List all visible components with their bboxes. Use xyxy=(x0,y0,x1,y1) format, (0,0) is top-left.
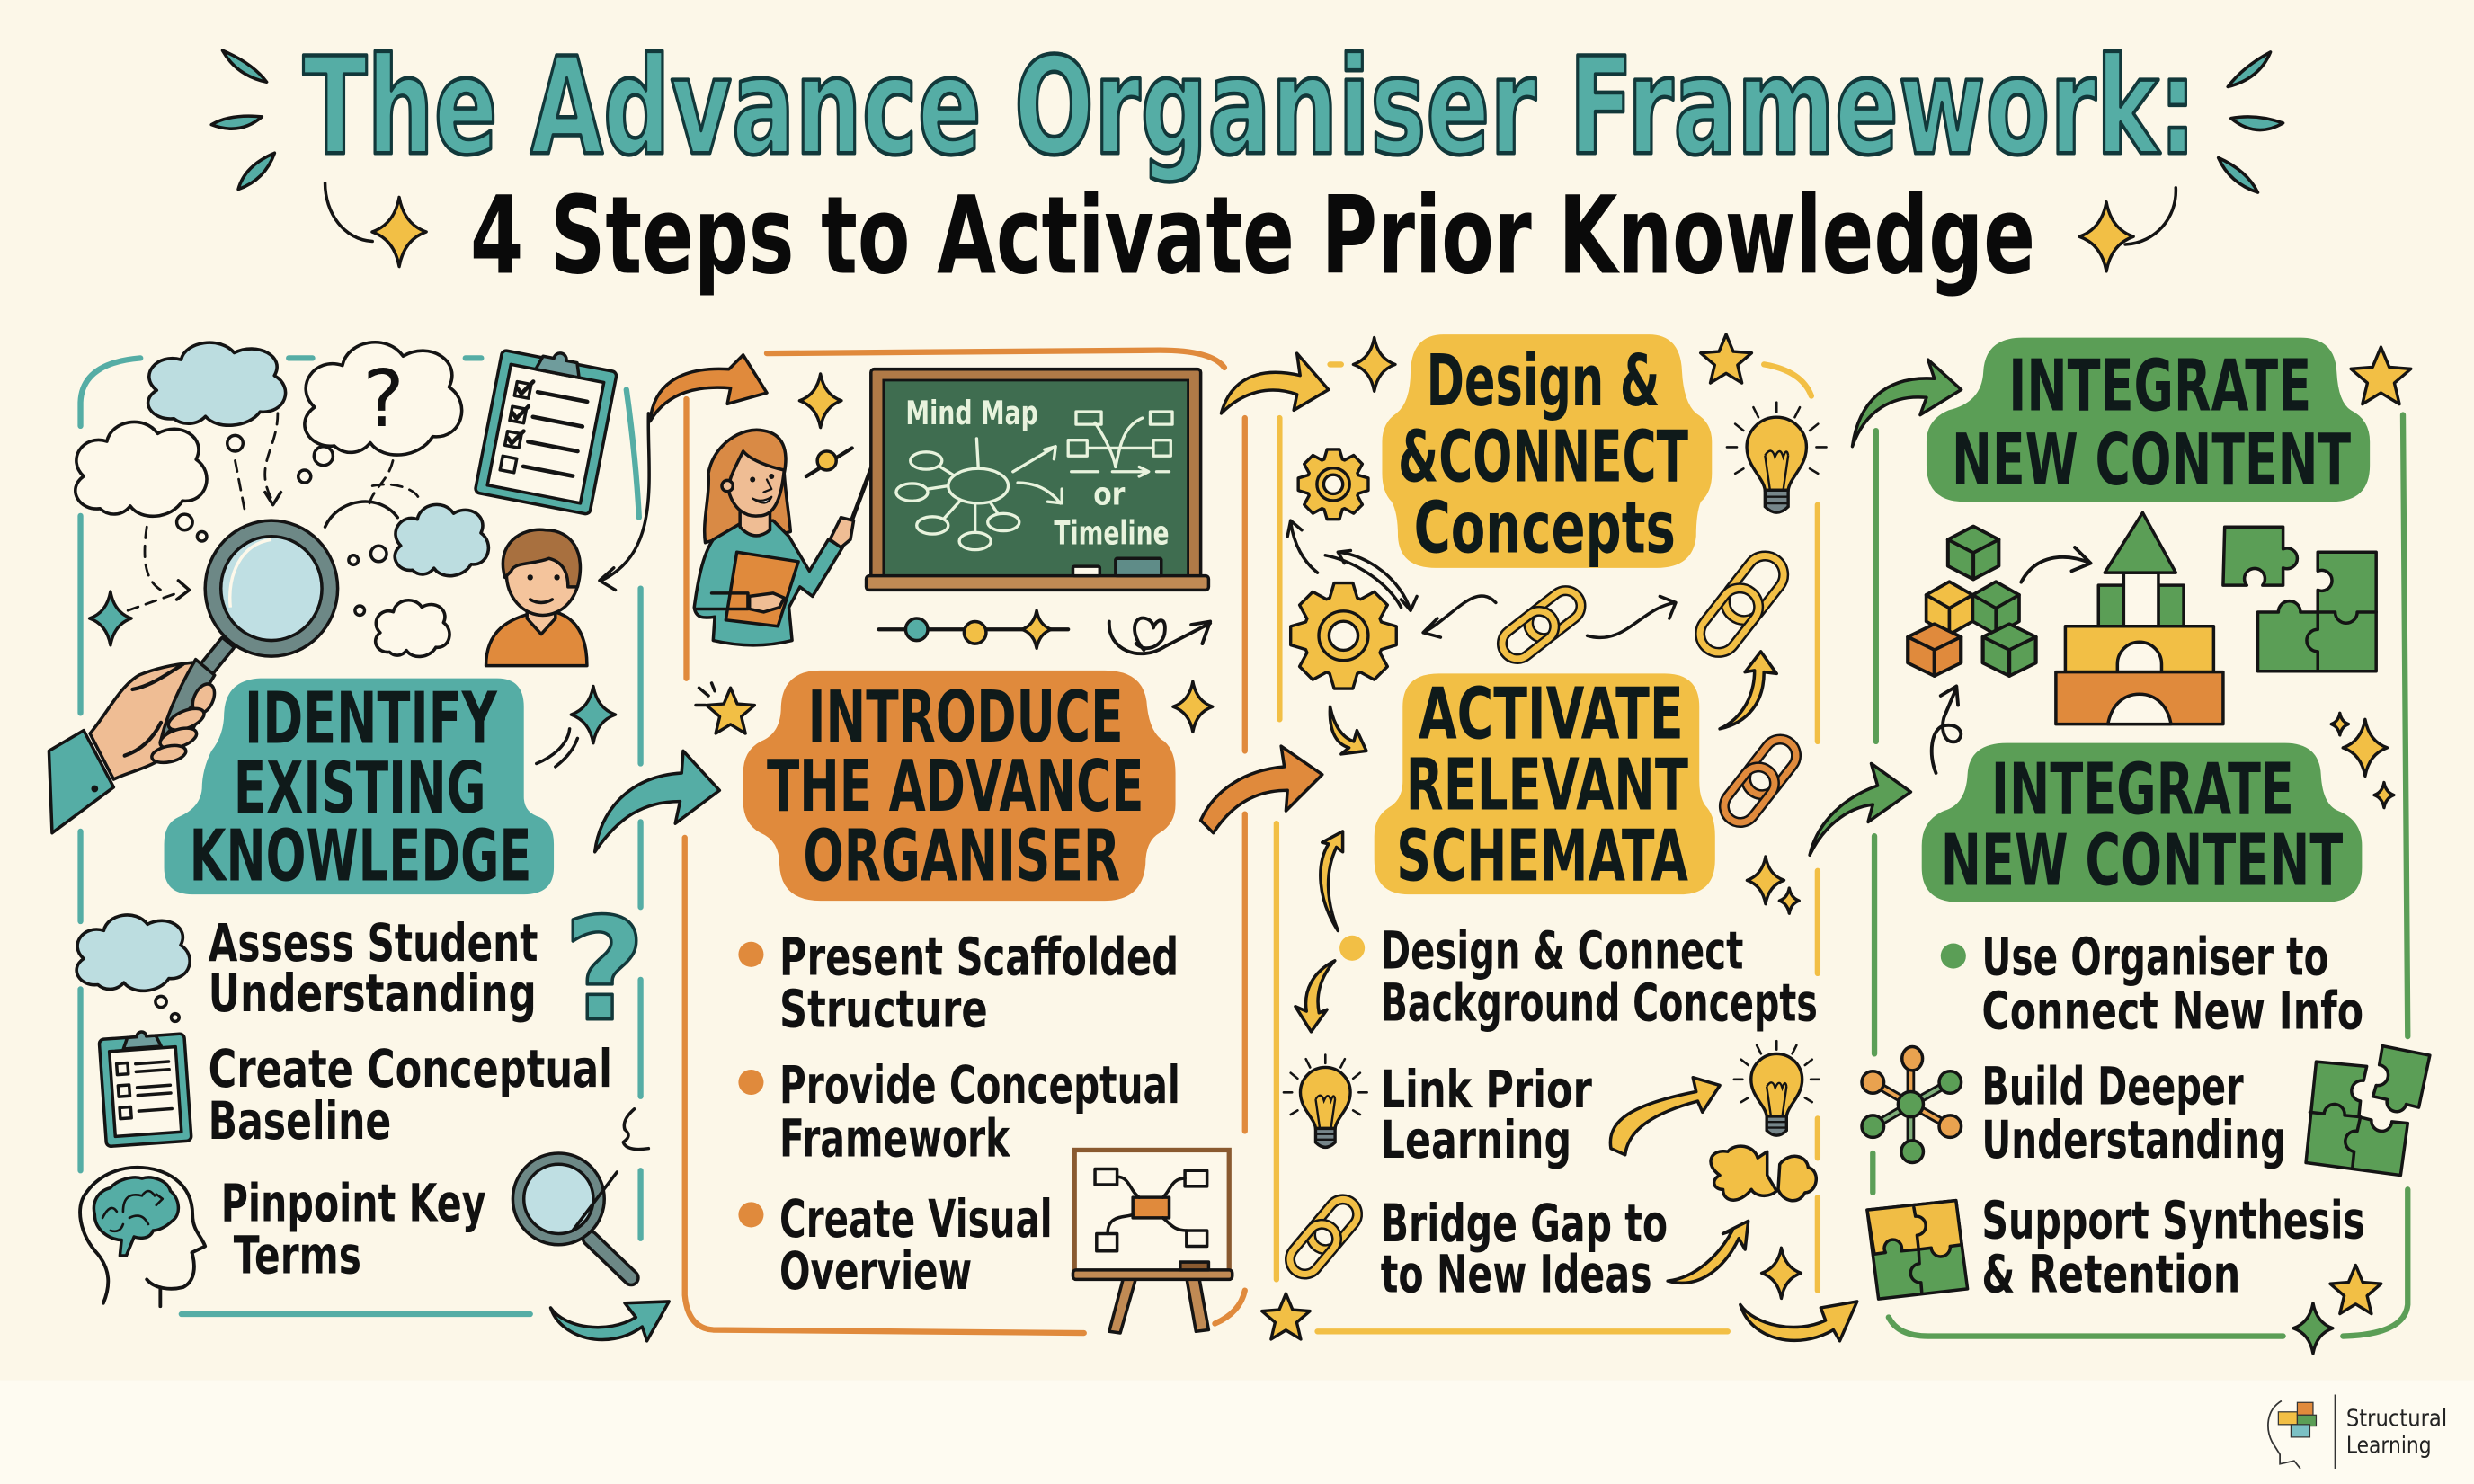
list: step 3 text: Bridge Gap to xyxy=(1381,1193,1668,1254)
icon: sparkle xyxy=(1762,1248,1801,1298)
icon: small gear xyxy=(1298,449,1368,520)
arrow: into step 4 xyxy=(1852,360,1962,447)
heading pill: introduce the advance organiser: ORGANISER xyxy=(803,814,1120,897)
thought dots and dashed links xyxy=(128,413,418,615)
heading pill: integrate new content xyxy=(1927,338,2370,502)
panel outline xyxy=(81,358,641,1314)
heading pill: integrate new content: INTEGRATE xyxy=(2008,344,2311,427)
arrow: into step 3 xyxy=(1221,353,1329,413)
icon: question thought cloud xyxy=(305,342,462,455)
heading pill: introduce the advance organiser: INTRODUCE xyxy=(808,676,1124,759)
icon: small blue cloud xyxy=(395,504,488,576)
icon: star xyxy=(2330,1266,2381,1314)
arrow: curved link to student xyxy=(600,413,649,590)
icon: teal sparkle xyxy=(90,591,131,645)
icon: sparkle xyxy=(799,374,841,428)
heading pill: identify existing knowledge: KNOWLEDGE xyxy=(190,814,531,897)
arrow: into step 2 xyxy=(650,355,767,422)
title accents xyxy=(211,50,2283,271)
heading pill: integrate new content second: INTEGRATE xyxy=(1991,749,2294,831)
list: step 3 text: Link Prior xyxy=(1381,1059,1592,1120)
text: pinpoint key terms xyxy=(221,1172,486,1285)
panel: step 4 integrate xyxy=(1810,338,2430,1354)
logo: structural learning xyxy=(2268,1394,2447,1469)
heading pill: introduce the advance organiser: THE ADVANCE xyxy=(767,745,1144,828)
icon: small clipboard xyxy=(99,1029,191,1147)
chalkboard: or xyxy=(1093,476,1126,513)
arrow: second green arrow xyxy=(1810,763,1910,855)
list: step 3 text: Design & Connect xyxy=(1381,920,1743,982)
text: create conceptual baseline: Baseline xyxy=(209,1090,391,1151)
logo: structural learning: Structural xyxy=(2346,1405,2447,1432)
icon: timeline doodle xyxy=(879,610,1068,648)
list: step 4 text xyxy=(1941,927,2365,1304)
icon: small cloud xyxy=(76,915,190,1021)
text: create conceptual baseline xyxy=(209,1038,612,1151)
title xyxy=(303,30,2196,299)
list: step 3 text: Learning xyxy=(1381,1109,1571,1170)
icon: stacked cubes xyxy=(1908,526,2036,676)
list: step 3 text: to New Ideas xyxy=(1381,1243,1652,1304)
icon: centre chain xyxy=(1496,584,1587,665)
icon: small white cloud xyxy=(376,600,449,656)
icon: small magnifier xyxy=(512,1109,648,1278)
small arrows xyxy=(1295,652,1776,1283)
icon: sparkle and swoosh xyxy=(537,686,616,767)
list: step 4 text: Use Organiser to xyxy=(1981,927,2329,988)
icon: teal question mark: ? xyxy=(563,888,645,1053)
arrow: bottom swoop xyxy=(551,1302,669,1341)
heading pill: introduce the advance organiser xyxy=(743,671,1176,901)
heading pill: design and connect concepts xyxy=(1382,334,1712,569)
icon: puzzle pieces xyxy=(2223,527,2376,671)
text: pinpoint key terms: Pinpoint Key xyxy=(221,1172,486,1233)
arrow: squiggle xyxy=(1932,686,1961,773)
panel outline xyxy=(1873,415,2407,1337)
icon: loop arrow xyxy=(1109,618,1210,653)
heading pill: design and connect concepts: Concepts xyxy=(1414,486,1676,569)
mind map sketch xyxy=(896,412,1172,550)
icon: stars xyxy=(696,681,1213,733)
icon: network xyxy=(1862,1046,1962,1162)
text: assess student understanding xyxy=(209,912,538,1024)
text: pinpoint key terms: Terms xyxy=(234,1224,361,1285)
icon: student face xyxy=(486,529,587,666)
text: create conceptual baseline: Create Conceptual xyxy=(209,1038,612,1099)
chalkboard: Timeline xyxy=(1054,514,1170,553)
panel: step 1 identify xyxy=(49,342,719,1341)
icon: question thought cloud: ? xyxy=(362,353,405,445)
arrow: blocks to castle xyxy=(2021,547,2090,582)
heading pill: design and connect concepts: Design & xyxy=(1427,340,1660,422)
logo: structural learning: Learning xyxy=(2346,1431,2432,1458)
icon: large gear xyxy=(1291,583,1396,689)
icon: star xyxy=(1262,1293,1310,1339)
heading pill: identify existing knowledge xyxy=(165,678,554,897)
list: step 2 bullets: Framework xyxy=(779,1107,1010,1169)
list: step 3 text: Background Concepts xyxy=(1381,973,1818,1034)
panel: step 2 introduce xyxy=(650,351,1322,1333)
heading pill: design and connect concepts: &CONNECT xyxy=(1398,415,1688,498)
icon: yellow chain xyxy=(1284,1194,1364,1280)
arrows beside chain xyxy=(1423,596,1676,637)
heading pill: activate relevant schemata: RELEVANT xyxy=(1406,743,1688,826)
icon: magnifying glass and hand xyxy=(49,519,339,833)
text: assess student understanding: Assess Student xyxy=(209,912,538,973)
arrow: bottom swoop xyxy=(1740,1302,1857,1341)
heading pill: activate relevant schemata: SCHEMATA xyxy=(1396,814,1688,897)
list: step 2 bullets: Create Visual xyxy=(779,1188,1053,1249)
panel outline xyxy=(1277,364,1818,1331)
list: step 2 bullets xyxy=(738,927,1180,1302)
text: assess student understanding: Understanding xyxy=(209,963,537,1024)
heading pill: activate relevant schemata xyxy=(1375,672,1715,897)
icon: yellow green puzzle xyxy=(1867,1201,1968,1299)
icon: node dot xyxy=(806,448,852,476)
list: step 2 bullets: Overview xyxy=(779,1240,972,1302)
icon: teacher with pointer xyxy=(694,430,879,645)
list: step 2 bullets: Provide Conceptual xyxy=(779,1054,1180,1115)
icon: sparkles xyxy=(2331,713,2394,808)
heading pill: integrate new content second xyxy=(1922,743,2362,902)
board text: Mind Map xyxy=(905,394,1038,432)
icon: sparkles xyxy=(1747,857,1799,913)
chalk tray xyxy=(867,558,1208,590)
icon: green puzzle xyxy=(2306,1046,2430,1176)
list: step 2 bullets: Present Scaffolded xyxy=(779,927,1179,988)
arrows around gears xyxy=(1287,520,1417,610)
panel outline xyxy=(685,351,1245,1333)
icon: bulb right xyxy=(1734,1041,1820,1135)
heading pill: identify existing knowledge: IDENTIFY xyxy=(245,678,497,760)
icon: clipboard checklist xyxy=(475,342,618,515)
list: step 3 text xyxy=(1339,920,1818,1304)
icon: bulb left xyxy=(1284,1055,1367,1147)
panel: step 3 connect xyxy=(1221,334,1857,1341)
icon: star xyxy=(2351,347,2411,404)
list: step 4 text: Build Deeper xyxy=(1981,1056,2244,1117)
arrow: to step 3 xyxy=(1201,746,1322,833)
list: step 4 text: & Retention xyxy=(1981,1243,2240,1304)
heading pill: identify existing knowledge: EXISTING xyxy=(234,747,486,830)
icon: light bulb xyxy=(1727,403,1827,512)
icon: right chain xyxy=(1693,548,1792,660)
icon: head with brain xyxy=(80,1168,205,1306)
arrow: to step 2 xyxy=(595,751,719,852)
icon: block castle xyxy=(2056,512,2223,724)
heading pill: activate relevant schemata: ACTIVATE xyxy=(1419,672,1684,755)
list: step 4 text: Understanding xyxy=(1981,1109,2286,1170)
icon: orange chain xyxy=(1718,733,1802,829)
icon: yellow puzzle cloud xyxy=(1711,1146,1816,1201)
chalkboard xyxy=(867,369,1208,590)
icon: easel with diagram xyxy=(1072,1150,1233,1333)
icon: green sparkle xyxy=(2293,1303,2333,1354)
icon: sparkle and star xyxy=(1353,334,1751,391)
list: step 2 bullets: Structure xyxy=(779,979,988,1040)
icon: white thought cloud xyxy=(76,422,207,516)
icon: blue thought cloud xyxy=(148,342,286,425)
